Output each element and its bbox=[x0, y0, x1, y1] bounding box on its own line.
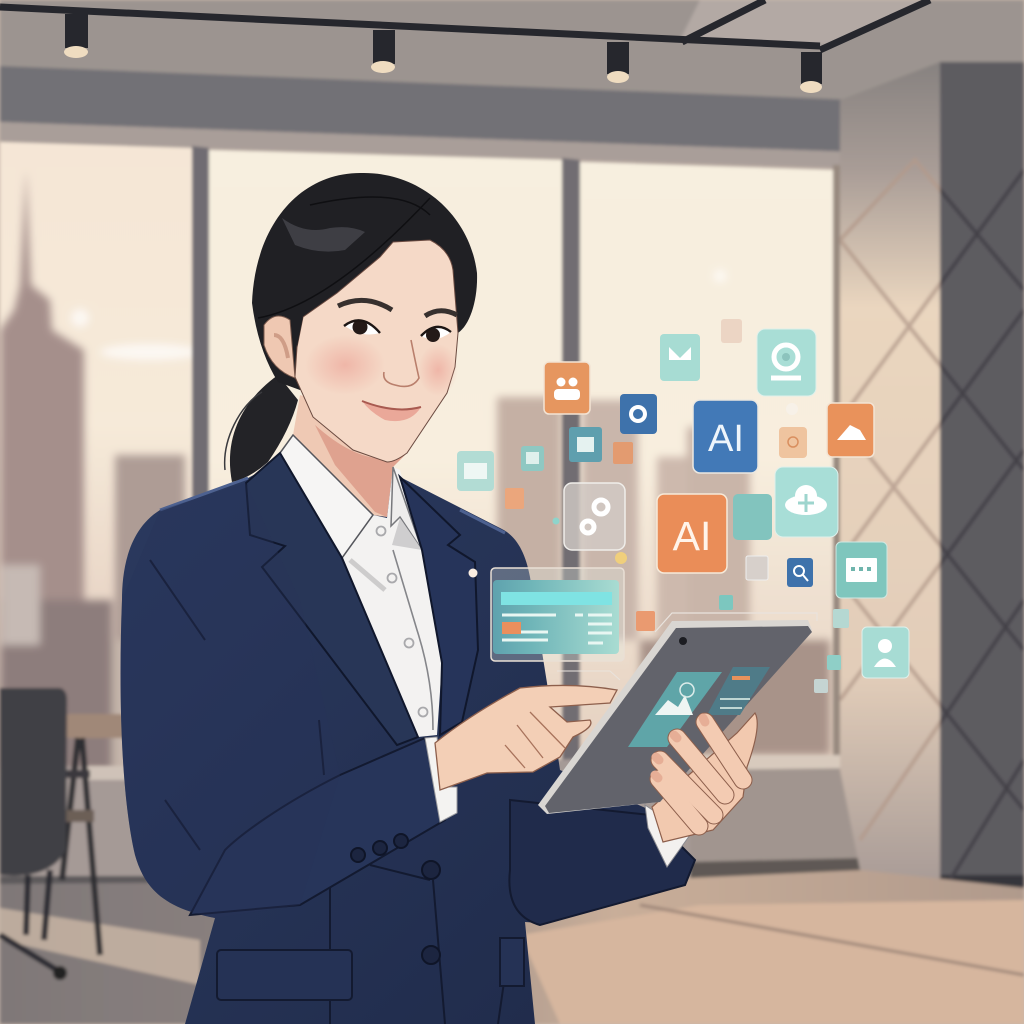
right cuff bbox=[645, 805, 690, 867]
hologram cards bbox=[425, 319, 909, 867]
hologram screen bbox=[491, 568, 624, 680]
location tile bbox=[862, 627, 909, 678]
ponytail bbox=[230, 375, 298, 482]
nose bbox=[384, 340, 419, 386]
finger nails bbox=[655, 718, 705, 778]
pointing hand bbox=[435, 685, 617, 790]
cloud tile bbox=[775, 467, 838, 537]
icon tiles bbox=[457, 319, 909, 693]
sill and low wall bbox=[0, 755, 862, 880]
jacket buttons bbox=[351, 834, 440, 964]
small top tile bbox=[721, 319, 742, 343]
people tile bbox=[544, 362, 590, 414]
gears glass tile bbox=[564, 483, 625, 550]
left lapel bbox=[246, 453, 418, 745]
mail tile bbox=[660, 334, 700, 381]
mouth bbox=[362, 401, 421, 421]
floor bbox=[0, 870, 1024, 1024]
tablet screen card bbox=[628, 672, 722, 747]
gear blue tile bbox=[620, 394, 657, 434]
chair and table bbox=[0, 688, 135, 980]
neck bbox=[293, 395, 400, 517]
left forearm sleeve bbox=[190, 738, 445, 915]
right wall bbox=[840, 62, 940, 880]
diamond wall pattern dark bbox=[940, 170, 1024, 876]
jacket creases bbox=[150, 560, 510, 1024]
fingers holding tablet bbox=[655, 718, 743, 826]
eyebrows bbox=[338, 300, 457, 316]
left white cuff bbox=[425, 737, 457, 822]
eyes bbox=[344, 320, 451, 342]
hair highlights bbox=[282, 218, 365, 252]
collar bbox=[280, 435, 373, 558]
shirt bbox=[280, 435, 442, 737]
diamond wall pattern beige bbox=[838, 160, 942, 840]
AI tile blue: AI bbox=[708, 418, 744, 460]
ceiling beam bbox=[0, 66, 855, 152]
tablet people icon bbox=[655, 695, 693, 715]
right palm behind tablet bbox=[652, 713, 757, 842]
teal square tile bbox=[733, 494, 772, 540]
AI tile orange: AI bbox=[673, 513, 711, 559]
jacket bbox=[121, 395, 695, 1024]
orange check tile bbox=[827, 403, 874, 457]
shirt placket bbox=[393, 550, 433, 730]
tablet bbox=[538, 620, 812, 814]
search tile bbox=[787, 558, 813, 587]
calendar tile bbox=[836, 542, 887, 598]
ceiling track lights bbox=[0, 0, 930, 93]
person bbox=[121, 173, 695, 1024]
right lapel bbox=[400, 477, 478, 735]
tablet and hands bbox=[425, 620, 812, 867]
ear bbox=[264, 316, 295, 378]
small tiles bbox=[457, 427, 849, 693]
window frames bbox=[192, 146, 209, 770]
glow dots bbox=[468, 403, 798, 578]
gear tile top bbox=[757, 329, 816, 396]
city skyline bbox=[0, 170, 830, 770]
windows bbox=[0, 142, 192, 770]
shoulder highlight bbox=[160, 478, 505, 533]
ceiling bbox=[0, 0, 1024, 100]
AI tile blue bbox=[693, 400, 758, 473]
shirt buttons bbox=[376, 526, 428, 716]
right sleeve bbox=[509, 800, 695, 925]
small face tile bbox=[779, 427, 807, 458]
face bbox=[295, 240, 458, 462]
AI tile orange bbox=[657, 494, 727, 573]
pocket bbox=[217, 950, 352, 1000]
hair back bbox=[252, 173, 477, 390]
